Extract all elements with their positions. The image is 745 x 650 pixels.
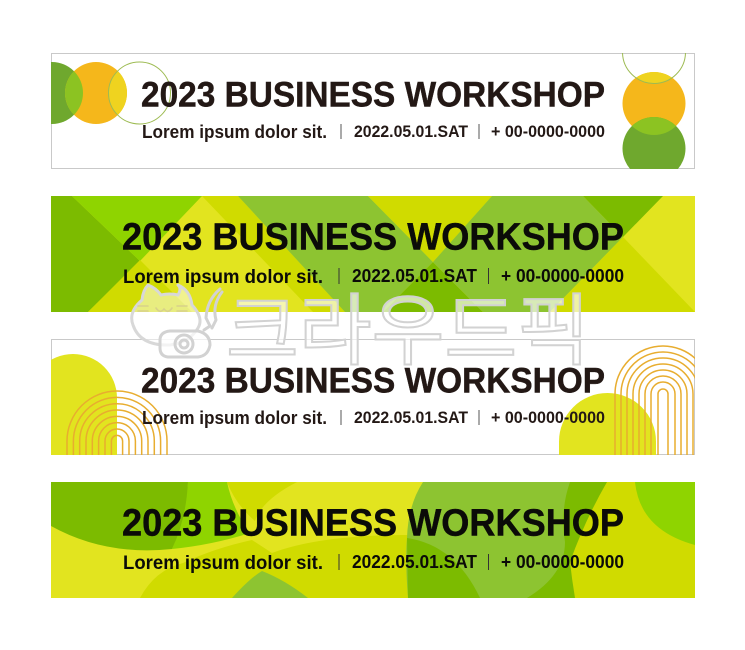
text: banner 2 details: 2022.05.01.SAT [352, 266, 477, 286]
text: banner 2 details: Lorem ipsum dolor sit. [123, 267, 323, 288]
background: diagonal polygons [51, 196, 695, 312]
text: banner 4 details [123, 552, 624, 574]
icon: right overlapping circles [622, 53, 686, 169]
text: banner 4 details: Lorem ipsum dolor sit. [123, 553, 323, 574]
watermark: cat, camera and site name [132, 269, 590, 381]
heading: banner 4 title: 2023 BUSINESS WORKSHOP [122, 502, 624, 544]
heading: banner 2 title: 2023 BUSINESS WORKSHOP [122, 216, 624, 258]
text: banner 3 details: + 00-0000-0000 [491, 409, 605, 427]
text: banner 3 details: Lorem ipsum dolor sit. [142, 408, 327, 428]
text: banner 3 details: 2022.05.01.SAT [354, 409, 468, 427]
icon: left concentric arches [67, 391, 167, 455]
icon: cat head [132, 285, 200, 345]
text: banner 1 details: 2022.05.01.SAT [354, 123, 468, 141]
panel: banner 3 white with domes and arches [29, 340, 711, 455]
text: banner 3 details [142, 408, 605, 428]
icon: right yellow dome [559, 393, 656, 455]
text: banner 4 details: + 00-0000-0000 [501, 552, 624, 572]
panel: banner 4 green organic pattern [51, 482, 695, 598]
panel: banner 2 green diagonal pattern [51, 196, 695, 312]
text: banner 1 details: + 00-0000-0000 [491, 123, 605, 141]
panel: banner 1 white with circles [51, 53, 695, 169]
text: banner 1 details: Lorem ipsum dolor sit. [142, 122, 327, 142]
text: banner 2 details: + 00-0000-0000 [501, 266, 624, 286]
background: curved blobs [51, 482, 695, 598]
icon: right concentric arches [614, 345, 695, 455]
text: watermark wordmark: 크라우드픽 [226, 269, 590, 381]
icon: left overlapping circles [51, 62, 171, 124]
text: banner 1 details [142, 122, 605, 142]
icon: camera with strap [160, 289, 222, 357]
heading: banner 3 title: 2023 BUSINESS WORKSHOP [141, 362, 605, 400]
text: banner 2 details [123, 266, 624, 288]
infographic: four workshop banners [51, 53, 695, 598]
icon: left yellow dome [51, 354, 117, 455]
text: banner 4 details: 2022.05.01.SAT [352, 552, 477, 572]
heading: banner 1 title: 2023 BUSINESS WORKSHOP [141, 76, 605, 114]
